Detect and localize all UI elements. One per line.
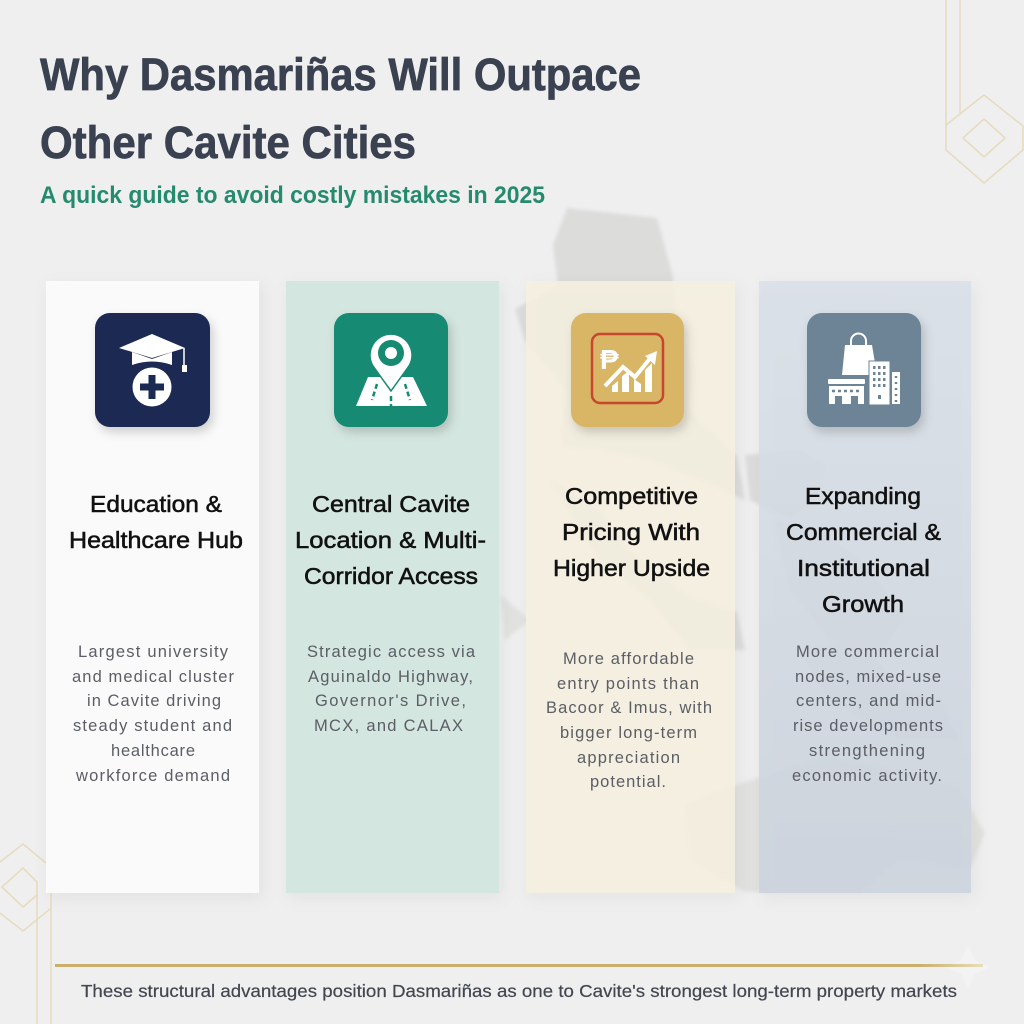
text: education description — [72, 643, 234, 785]
text: education description: and medical cluster — [72, 668, 234, 686]
text: location description — [307, 643, 476, 735]
heading: commercial: Growth — [822, 591, 904, 617]
panel: commercial growth — [759, 281, 971, 893]
text: commercial description: strengthening — [809, 742, 925, 760]
text: pricing description — [546, 650, 712, 791]
text: location description: MCX, and CALAX — [314, 717, 463, 735]
text: location description: Strategic access via — [307, 643, 476, 661]
text: commercial description: economic activity. — [792, 767, 942, 785]
footer statement: These structural advantages position Dasmariñas as one to Cavite's strongest long-term property markets — [81, 981, 957, 1001]
panel: competitive pricing — [526, 281, 735, 893]
text: pricing description: Bacoor & Imus, with — [546, 699, 712, 717]
subtitle: A quick guide to avoid costly mistakes in 2025 — [40, 182, 545, 209]
heading: pricing: Pricing With — [562, 519, 700, 545]
icon: peso growth chart — [571, 313, 684, 427]
heading: commercial: Institutional — [797, 555, 930, 581]
heading: commercial: Commercial & — [786, 519, 941, 545]
text: education description: in Cavite driving — [87, 692, 221, 710]
icon: map pin on road map — [334, 313, 448, 427]
text: pricing description: bigger long-term — [560, 724, 697, 742]
text: commercial description: More commercial — [796, 643, 939, 661]
heading: education — [69, 491, 243, 553]
text: commercial description: nodes, mixed-use — [795, 668, 941, 686]
heading: education: Education & — [90, 491, 222, 517]
text: location description: Governor's Drive, — [315, 692, 466, 710]
text: education description: Largest university — [78, 643, 229, 661]
icon: shopping bag and buildings — [807, 313, 921, 427]
icon: graduation cap with medical cross — [95, 313, 210, 427]
icon: peso growth chart: ₱ — [600, 344, 619, 375]
text: pricing description: entry points than — [557, 675, 699, 693]
text: pricing description: potential. — [590, 773, 666, 791]
text: commercial description: centers, and mid- — [796, 692, 941, 710]
heading: commercial — [786, 483, 941, 617]
title: Why Dasmariñas Will Outpace — [40, 49, 641, 100]
panel: education and healthcare hub — [46, 281, 259, 893]
text: commercial description: rise developments — [793, 717, 943, 735]
decoration: top right gold hexagon — [946, 0, 1023, 183]
text: education description: steady student and — [73, 717, 232, 735]
text: education description: workforce demand — [75, 767, 230, 785]
heading: pricing — [553, 483, 710, 581]
heading: location: Location & Multi- — [295, 527, 486, 553]
sparkle — [946, 945, 990, 989]
text: pricing description: More affordable — [563, 650, 694, 668]
heading: location: Central Cavite — [312, 491, 470, 517]
footer rule — [55, 964, 983, 967]
title — [40, 49, 641, 168]
text: pricing description: appreciation — [577, 749, 680, 767]
text: commercial description — [792, 643, 943, 785]
heading: location — [295, 491, 486, 589]
text: education description: healthcare — [111, 742, 195, 760]
decoration: bottom left gold hexagon — [0, 844, 51, 1024]
heading: location: Corridor Access — [304, 563, 478, 589]
text: location description: Aguinaldo Highway, — [308, 668, 473, 686]
title: Other Cavite Cities — [40, 117, 416, 168]
panel: central location — [286, 281, 499, 893]
heading: pricing: Competitive — [565, 483, 698, 509]
background map of the Philippines — [500, 208, 985, 892]
heading: commercial: Expanding — [805, 483, 921, 509]
heading: education: Healthcare Hub — [69, 527, 243, 553]
heading: pricing: Higher Upside — [553, 555, 710, 581]
